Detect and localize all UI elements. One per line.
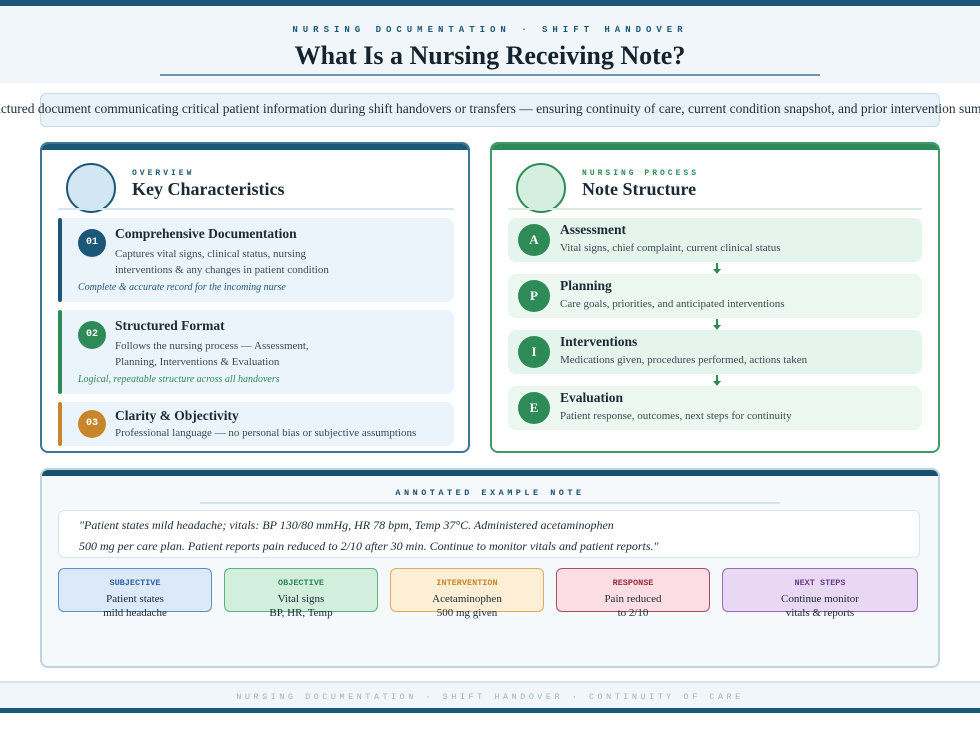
panel: key characteristics: OVERVIEW bbox=[132, 169, 194, 178]
tag: objective bbox=[224, 568, 378, 612]
quote box: "Patient states mild headache; vitals: BP 130/80 mmHg, HR 78 bpm, Temp 37°C. Administered acetaminophen bbox=[79, 518, 614, 532]
item 03: Professional language — no personal bias or subjective assumptions bbox=[115, 427, 416, 439]
step E: E bbox=[530, 400, 538, 415]
text: vitals & reports bbox=[786, 607, 854, 619]
item 01: Complete & accurate record for the incoming nurse bbox=[78, 282, 286, 293]
panel: key characteristics bbox=[40, 142, 470, 453]
step I: Interventions bbox=[560, 334, 637, 349]
tag: next steps: NEXT STEPS bbox=[794, 578, 846, 588]
text: to 2/10 bbox=[618, 607, 648, 619]
arrow bbox=[713, 375, 721, 386]
title: What Is a Nursing Receiving Note? bbox=[295, 41, 685, 70]
heading: Key Characteristics bbox=[132, 179, 284, 199]
tag: intervention: INTERVENTION bbox=[436, 578, 498, 588]
text: BP, HR, Temp bbox=[269, 607, 333, 619]
step A: Assessment bbox=[560, 222, 626, 237]
item 02 bbox=[58, 310, 454, 394]
kicker: NURSING DOCUMENTATION · SHIFT HANDOVER bbox=[292, 25, 688, 35]
heading: Note Structure bbox=[582, 179, 696, 199]
tag: subjective: SUBJECTIVE bbox=[109, 578, 160, 588]
text: mild headache bbox=[103, 607, 167, 619]
step A: Vital signs, chief complaint, current clinical status bbox=[560, 242, 780, 254]
item 02: 02 bbox=[86, 329, 98, 340]
item 01 bbox=[58, 218, 454, 302]
item 01: interventions & any changes in patient condition bbox=[115, 264, 329, 276]
item 01: Captures vital signs, clinical status, nursing bbox=[115, 248, 306, 260]
arrow bbox=[713, 263, 721, 274]
tag: subjective bbox=[58, 568, 212, 612]
icon: circle bbox=[66, 163, 116, 213]
footer: NURSING DOCUMENTATION · SHIFT HANDOVER · CONTINUITY OF CARE bbox=[236, 692, 744, 702]
step P bbox=[508, 274, 922, 318]
footer bbox=[0, 681, 980, 713]
step I: I bbox=[531, 344, 537, 359]
tag: intervention: Acetaminophen bbox=[432, 593, 502, 605]
item 03 bbox=[58, 402, 454, 446]
header band bbox=[0, 0, 980, 83]
tag: next steps: Continue monitor bbox=[781, 593, 859, 605]
step P: Planning bbox=[560, 278, 612, 293]
item 02: Follows the nursing process — Assessment, bbox=[115, 340, 309, 352]
step I: Medications given, procedures performed, actions taken bbox=[560, 354, 807, 366]
quote box: 500 mg per care plan. Patient reports pain reduced to 2/10 after 30 min. Continue to monitor vitals and patient reports." bbox=[79, 539, 659, 553]
item 02: Structured Format bbox=[115, 318, 225, 333]
item 03: Clarity & Objectivity bbox=[115, 408, 239, 423]
tag: response bbox=[556, 568, 710, 612]
step P: Care goals, priorities, and anticipated interventions bbox=[560, 298, 785, 310]
tag: objective: OBJECTIVE bbox=[278, 578, 324, 588]
item 03: 03 bbox=[86, 418, 98, 429]
quote box bbox=[58, 510, 920, 558]
step P: P bbox=[530, 288, 538, 303]
heading: ANNOTATED EXAMPLE NOTE bbox=[395, 488, 585, 498]
step E: Evaluation bbox=[560, 390, 623, 405]
tag: response: RESPONSE bbox=[613, 578, 653, 588]
panel: annotated example bbox=[40, 468, 940, 668]
step A bbox=[508, 218, 922, 262]
step A: A bbox=[529, 232, 539, 247]
icon: circle bbox=[516, 163, 566, 213]
arrow bbox=[713, 319, 721, 330]
item 02: Planning, Interventions & Evaluation bbox=[115, 356, 279, 368]
tag: objective: Vital signs bbox=[278, 593, 324, 605]
panel: note structure: NURSING PROCESS bbox=[582, 169, 699, 178]
intro box bbox=[40, 93, 940, 127]
tag: next steps bbox=[722, 568, 918, 612]
step E: Patient response, outcomes, next steps for continuity bbox=[560, 410, 792, 422]
text: 500 mg given bbox=[437, 607, 497, 619]
item 02: Logical, repeatable structure across all handovers bbox=[78, 374, 280, 385]
step I bbox=[508, 330, 922, 374]
panel: note structure bbox=[490, 142, 940, 453]
tag: response: Pain reduced bbox=[604, 593, 662, 605]
step E bbox=[508, 386, 922, 430]
tag: intervention bbox=[390, 568, 544, 612]
item 01: Comprehensive Documentation bbox=[115, 226, 297, 241]
tag: subjective: Patient states bbox=[106, 593, 164, 605]
item 01: 01 bbox=[86, 237, 98, 248]
